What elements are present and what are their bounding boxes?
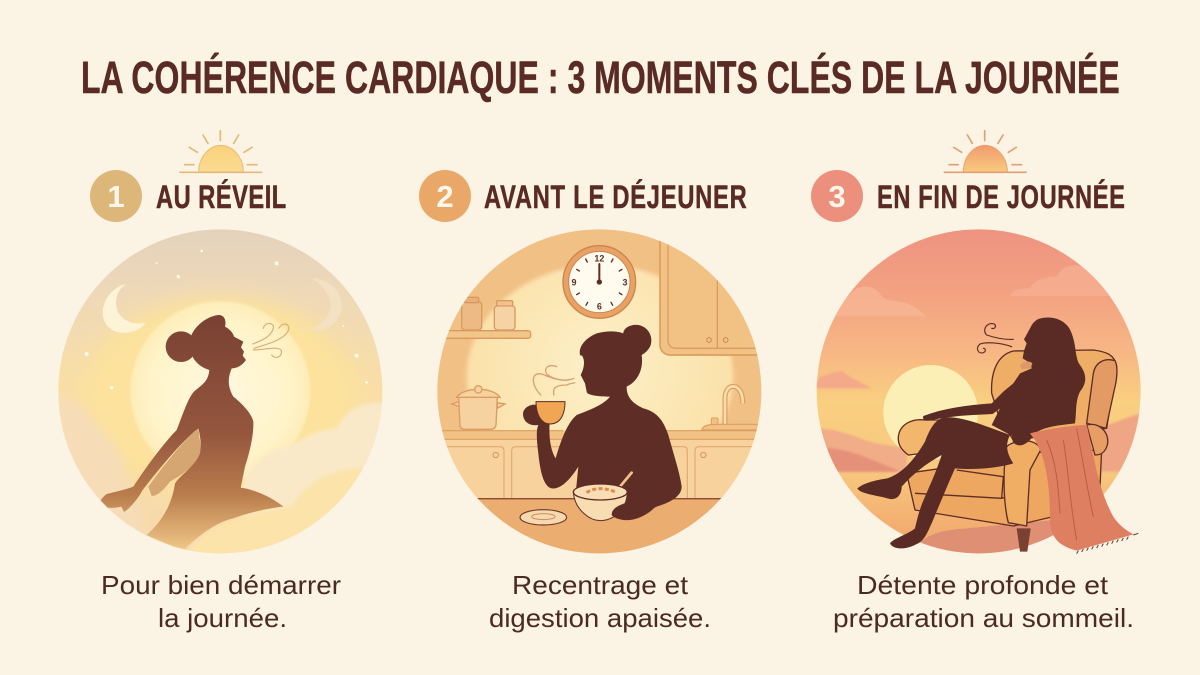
heading: avant le déjeuner: AVANT LE DÉJEUNER xyxy=(484,180,747,215)
hills xyxy=(813,428,907,472)
far arm xyxy=(148,428,202,496)
text: en fin de journée: préparation au sommeil. xyxy=(833,603,1134,633)
upper cabinet xyxy=(659,240,758,356)
crescent moon left xyxy=(103,284,146,333)
heading: en fin de journée: EN FIN DE JOURNÉE xyxy=(877,180,1125,215)
badge: number 3: 3 xyxy=(828,179,846,214)
hand at neck xyxy=(1020,362,1032,369)
clock xyxy=(563,246,636,318)
pot xyxy=(452,386,505,429)
clock: 6 xyxy=(597,302,602,312)
text: avant le déjeuner xyxy=(489,570,711,633)
clouds: right xyxy=(241,401,382,516)
woman silhouette xyxy=(523,325,682,513)
sky clouds xyxy=(1011,266,1110,296)
tea cup xyxy=(536,402,565,424)
clock: 9 xyxy=(571,277,576,287)
woman silhouette xyxy=(857,317,1085,548)
illustration: woman breathing at sunrise xyxy=(58,229,382,554)
soup bowl xyxy=(573,473,632,521)
armchair xyxy=(898,350,1117,552)
icon: setting sun xyxy=(944,131,1026,172)
text: au réveil xyxy=(101,570,341,633)
heading: au réveil: AU RÉVEIL xyxy=(156,180,286,215)
panel: au réveil xyxy=(50,131,397,633)
text: au réveil: Pour bien démarrer xyxy=(101,570,341,600)
title: LA COHÉRENCE CARDIAQUE : 3 MOMENTS CLÉS DE LA JOURNÉE xyxy=(81,53,1120,103)
hand on bowl xyxy=(612,502,658,520)
panel: avant le déjeuner xyxy=(419,170,770,633)
breath swirls xyxy=(253,323,289,357)
counter and lower cabinets xyxy=(430,431,770,499)
illustration: kitchen with woman at table xyxy=(430,220,770,562)
blanket xyxy=(1030,425,1138,554)
badge: number 2 xyxy=(419,170,471,222)
text: au réveil: la journée. xyxy=(158,603,287,633)
badge: number 2: 2 xyxy=(436,179,454,214)
text: en fin de journée xyxy=(833,570,1134,633)
silhouette xyxy=(100,315,283,551)
clock: 12 xyxy=(594,253,604,263)
badge: number 1 xyxy=(90,170,142,222)
clouds: front xyxy=(188,466,364,554)
steam xyxy=(533,366,575,395)
clock: 3 xyxy=(622,277,627,287)
badge: number 3 xyxy=(811,170,863,222)
breath swirls xyxy=(978,324,1013,353)
table xyxy=(478,498,721,554)
sink and faucet xyxy=(702,386,763,430)
clouds: left xyxy=(58,396,142,533)
illustration: woman relaxing in armchair at sunset xyxy=(810,220,1150,560)
text: avant le déjeuner: Recentrage et xyxy=(512,570,689,600)
shelf and jars xyxy=(443,297,531,338)
sun xyxy=(883,365,978,460)
crescent moon right xyxy=(308,278,342,331)
text: avant le déjeuner: digestion apaisée. xyxy=(489,603,711,633)
badge: number 1: 1 xyxy=(107,179,125,214)
text: en fin de journée: Détente profonde et xyxy=(857,570,1109,600)
plate xyxy=(520,510,567,525)
panel: en fin de journée xyxy=(810,131,1150,633)
icon: rising sun xyxy=(180,131,262,172)
stars xyxy=(85,250,368,389)
